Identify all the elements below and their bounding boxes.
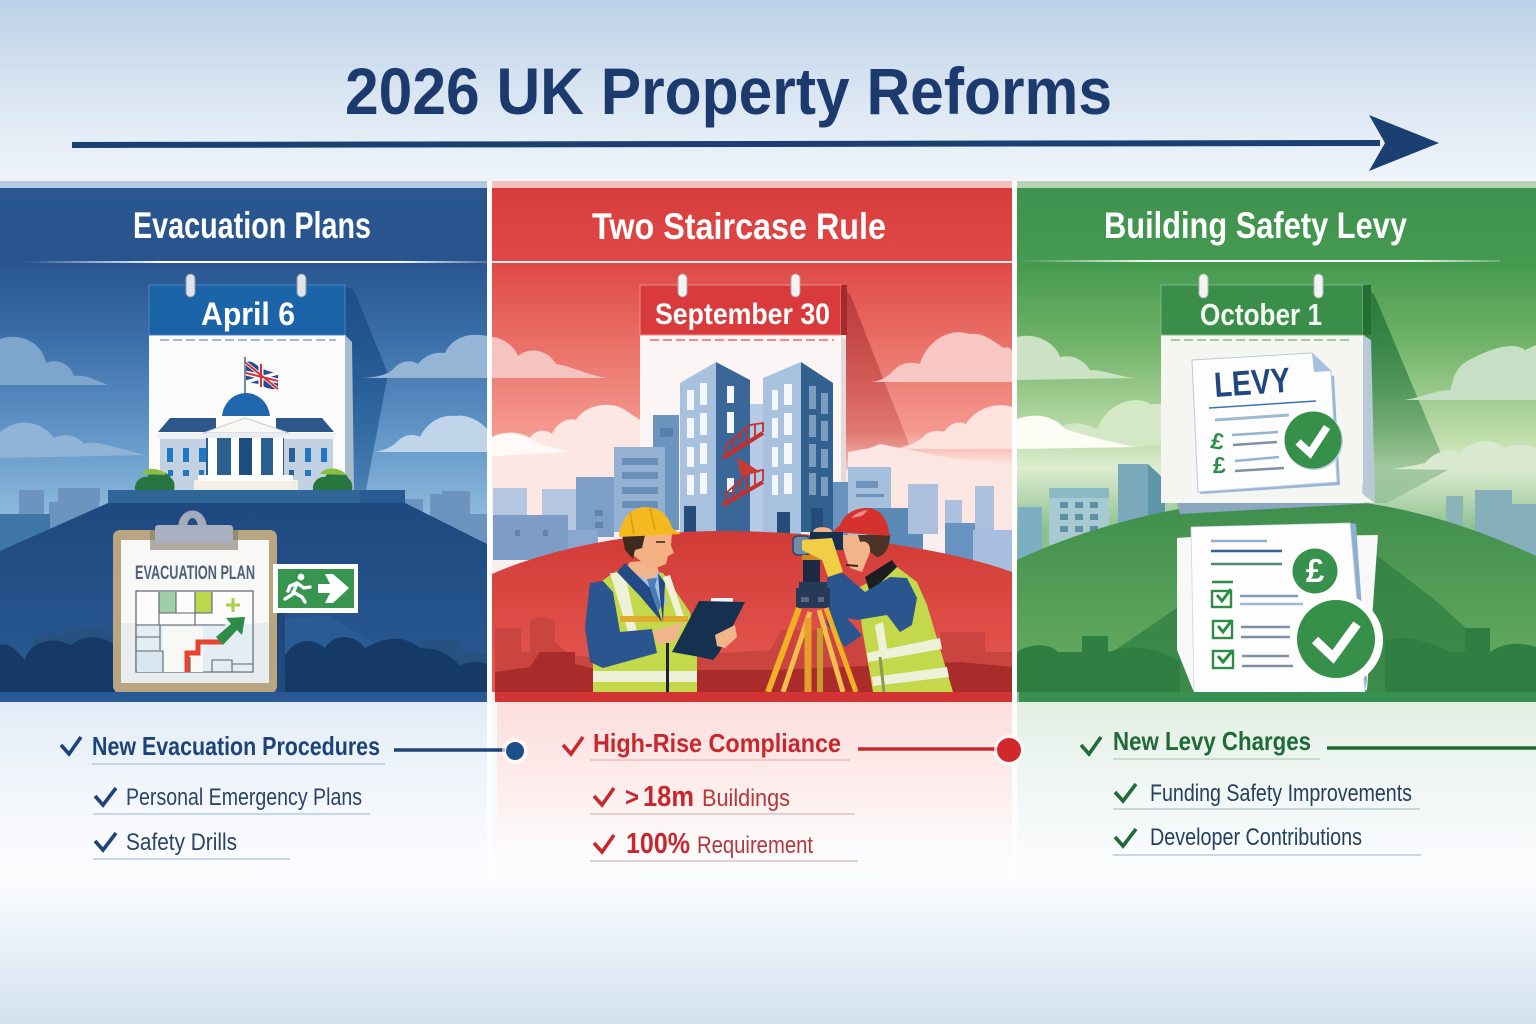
icon: exit sign (273, 564, 358, 613)
pound badge symbol: £ (1306, 552, 1325, 589)
text block: staircase items: Requirement (697, 832, 813, 859)
title: 2026 UK Property Reforms (345, 54, 1112, 128)
skyline (1018, 464, 1536, 567)
pound signs: £ (1213, 452, 1226, 478)
document: levy (1192, 353, 1343, 494)
tree silhouette (1017, 628, 1536, 692)
clipboard: evacuation plan (113, 510, 285, 693)
calendar: October 1 (1161, 274, 1375, 514)
surveyor with clipboard (585, 507, 745, 692)
text block: levy items: Developer Contributions (1150, 824, 1362, 851)
calendar shadow (841, 288, 909, 470)
clouds (0, 335, 487, 458)
fade: blue column (0, 702, 487, 882)
panel heading: Two Staircase Rule: Two Staircase Rule (592, 206, 886, 247)
panel heading: Evacuation Plans: Evacuation Plans (133, 205, 371, 246)
text block: evacuation items (61, 731, 528, 859)
skyline (493, 415, 1012, 580)
skyline (0, 488, 487, 574)
calendar: September 30 (640, 274, 847, 495)
pound signs (1209, 427, 1226, 478)
divider: left gutter (487, 181, 492, 881)
panel: evacuation plans (0, 181, 487, 702)
panel: building safety levy (1017, 181, 1536, 702)
pound signs: £ (1209, 427, 1226, 455)
text block: staircase items: Buildings (702, 785, 790, 812)
documents: checklist with pound badge (1177, 523, 1383, 693)
hill and platform (0, 503, 487, 692)
city silhouette (495, 617, 1012, 692)
calendar: April 6 (149, 274, 354, 490)
text block: levy items (1081, 726, 1536, 855)
text block: staircase items: > (625, 782, 639, 812)
text block: evacuation items: Personal Emergency Plans (126, 784, 362, 811)
clouds (1017, 336, 1536, 471)
tree silhouette (30, 628, 487, 680)
text block: staircase items (563, 728, 1024, 861)
theodolite on tripod (768, 527, 856, 692)
clouds (492, 332, 1012, 530)
text block: levy items: Funding Safety Improvements (1150, 780, 1412, 807)
panel heading: Building Safety Levy: Building Safety Levy (1104, 205, 1407, 246)
date: April 6: April 6 (201, 296, 295, 332)
divider: right gutter (1012, 181, 1017, 881)
levy label: LEVY (1213, 361, 1291, 405)
calendar shadow (1363, 288, 1448, 503)
text block: staircase items: 18m (643, 781, 694, 813)
fade: green column (1017, 702, 1536, 882)
icon: government building with flag (135, 357, 352, 490)
timeline arrow (72, 115, 1439, 171)
text block: evacuation items: Safety Drills (126, 829, 237, 856)
text block: staircase items: High-Rise Compliance (593, 728, 841, 758)
high-rise buildings with fire stairs (680, 362, 833, 537)
surveyor with theodolite (825, 508, 953, 692)
hill (492, 531, 1012, 692)
date: September 30: September 30 (655, 298, 830, 331)
text block: staircase items: 100% (626, 828, 690, 860)
floor plan (136, 591, 253, 672)
text block: levy items: New Levy Charges (1113, 726, 1311, 756)
fade: red column (497, 702, 1012, 882)
panel: two staircase rule (492, 181, 1012, 702)
hill (1017, 497, 1536, 692)
date: October 1: October 1 (1200, 297, 1322, 332)
calendar shadow (345, 286, 388, 490)
text block: evacuation items: New Evacuation Procedures (92, 731, 380, 761)
clipboard label: EVACUATION PLAN (135, 563, 255, 584)
